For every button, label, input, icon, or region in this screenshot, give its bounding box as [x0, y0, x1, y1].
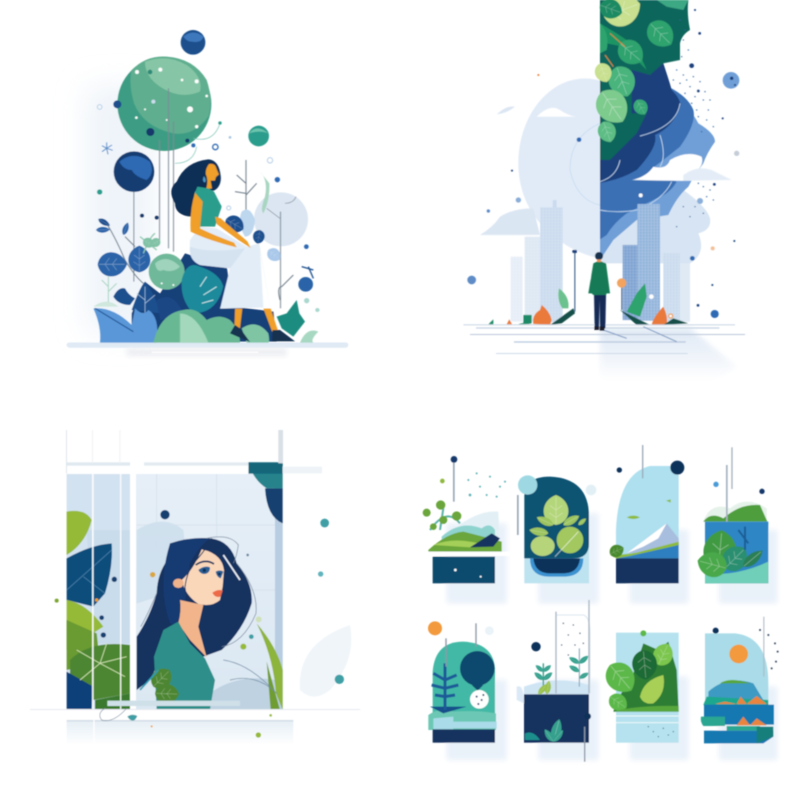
cloud, right: [632, 154, 732, 181]
panel grid lines: [137, 473, 275, 590]
ground bar: [67, 342, 348, 356]
panel: woman sitting among plants: [67, 30, 348, 356]
figure: man from behind: [588, 252, 610, 331]
legs: [234, 309, 278, 332]
clouds, left: [480, 106, 540, 235]
card 8: sun and strata: [701, 617, 779, 743]
shoes: [230, 325, 295, 342]
card shadows: [447, 677, 777, 760]
figure: seated woman: [171, 159, 295, 342]
hair back: [137, 538, 252, 690]
ground plants: [488, 283, 688, 325]
right arm: [215, 217, 251, 248]
left arm: [190, 193, 237, 247]
ground lines and reflection: [463, 324, 745, 380]
card shadows: [447, 513, 777, 603]
card row 1: [422, 445, 777, 603]
white frame: [66, 430, 322, 710]
foliage cluster under the woman: [93, 253, 318, 343]
plant: left branches and leaves: [93, 217, 162, 307]
neck and chest: [178, 600, 207, 657]
small dots and sparkles: [97, 100, 309, 249]
hair: [171, 159, 221, 217]
potted plant near shirt: [140, 663, 179, 704]
buildings: [511, 200, 690, 322]
plant: right branch: [222, 160, 319, 312]
scattered dots: [467, 9, 739, 318]
hair outline: [141, 537, 256, 647]
side pane tints: [67, 473, 283, 710]
window sill: [30, 708, 360, 745]
right foliage: [223, 623, 283, 710]
panel: man walking towards split city: [463, 0, 745, 380]
card 1: hills: [422, 456, 510, 583]
ball: blue sphere on stem: [114, 151, 154, 282]
ball: pale sphere: [254, 172, 308, 308]
street lamp and sign: [572, 250, 626, 312]
window glass: [67, 473, 283, 710]
left foliage: [67, 511, 130, 710]
top right foliage: [248, 462, 283, 523]
leaf canopy: [589, 0, 690, 160]
pale sky circle, left half: [518, 78, 600, 258]
ball: top blue sphere: [181, 30, 205, 55]
torso: [194, 187, 222, 227]
pale outer leaf: [300, 625, 351, 697]
teal shirt: [154, 622, 215, 709]
card 5: teal arch with spheres: [428, 621, 497, 743]
face and neck: [206, 164, 219, 189]
card row 2: [428, 600, 779, 762]
portrait woman: [137, 537, 256, 709]
face: [182, 549, 224, 605]
card 3: mountain: [607, 445, 684, 583]
panel: eight mini cards: [422, 445, 779, 762]
floating dots: [55, 510, 344, 738]
ball: teal sphere: [248, 126, 269, 146]
sky rings: [570, 103, 680, 212]
card 4: square pool: [694, 447, 768, 583]
card 7: green bush: [599, 630, 679, 743]
panel: woman at window: [30, 430, 360, 745]
right side painted sky: [600, 190, 710, 263]
skirt: [190, 227, 270, 309]
card 2: sprout in dark arch: [517, 475, 596, 583]
tree: large green canopy: [117, 56, 220, 252]
card 6: navy soil with plants: [517, 600, 591, 762]
